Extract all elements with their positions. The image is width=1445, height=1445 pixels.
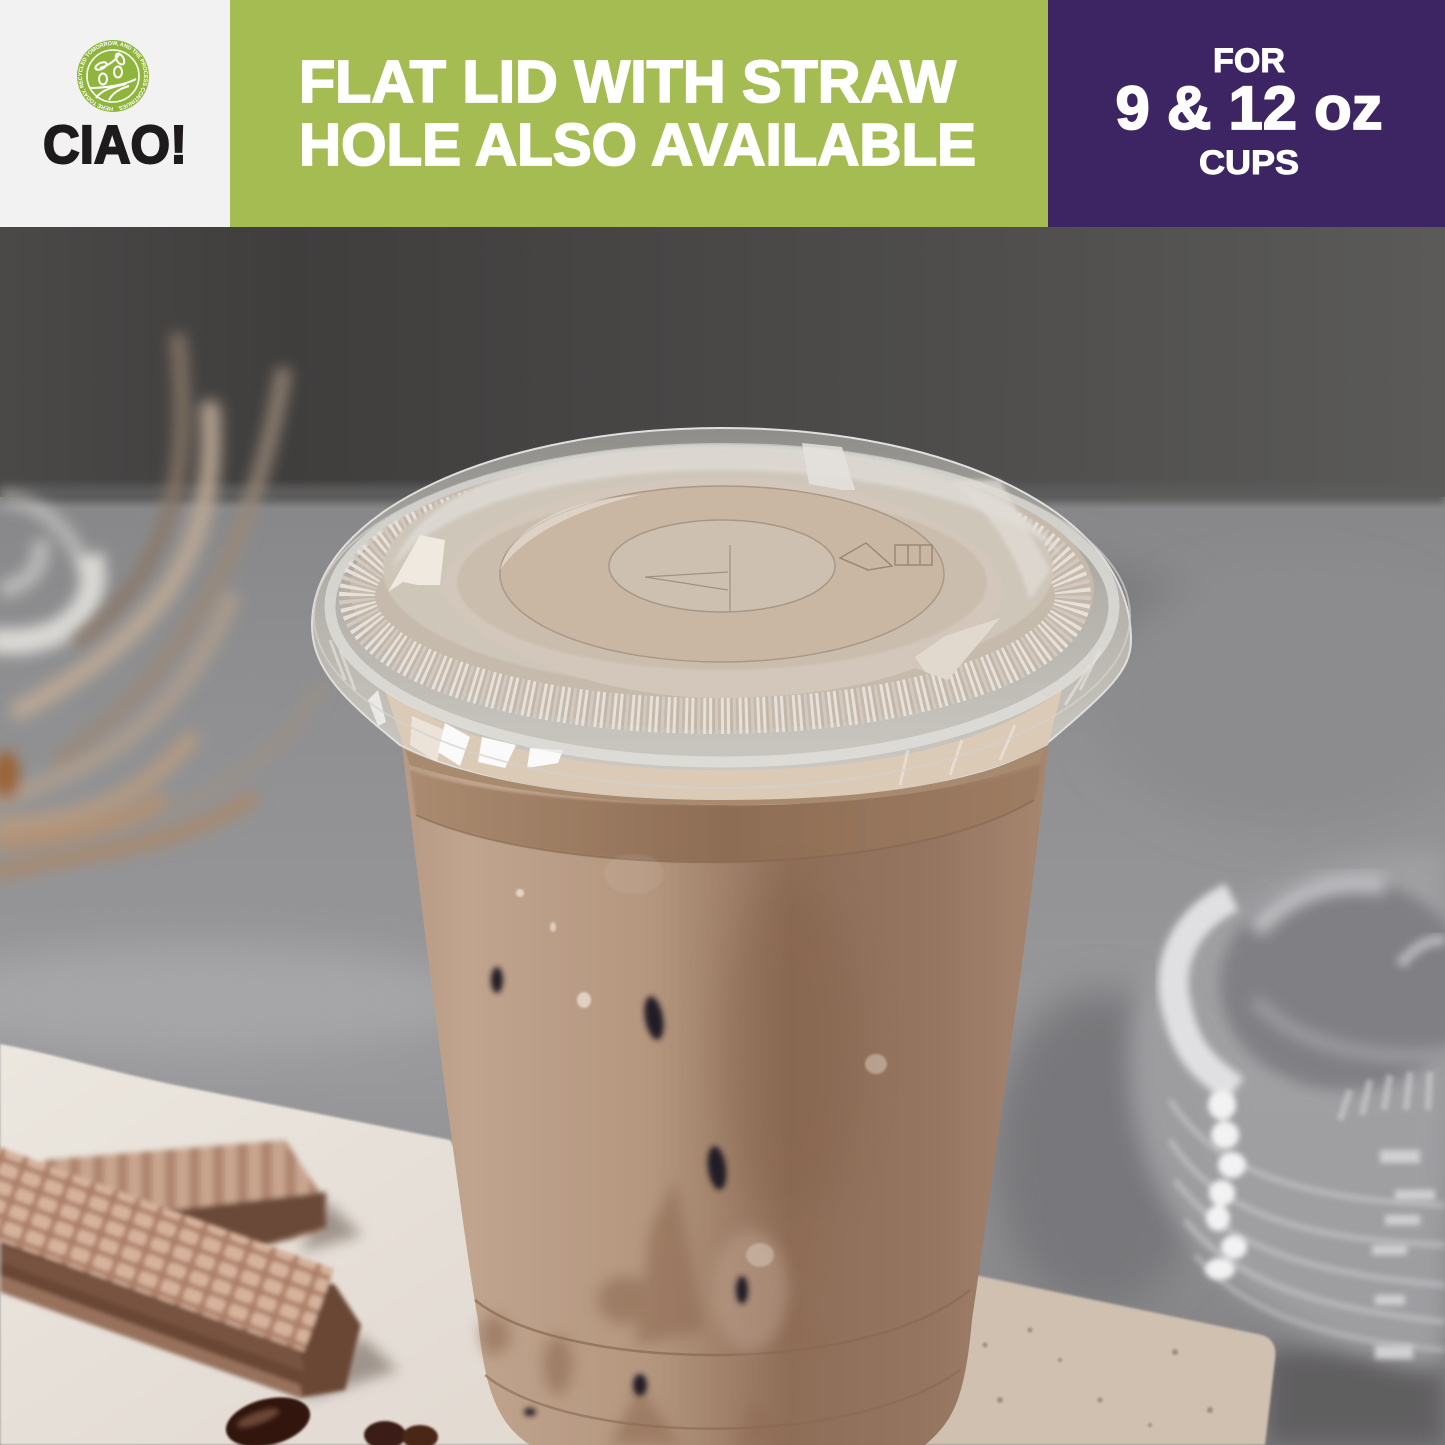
rim xyxy=(330,450,1114,762)
bottom rings xyxy=(475,1290,970,1429)
size text: CUPS xyxy=(1199,144,1299,182)
dark tapioca pearls xyxy=(491,967,748,1416)
cup of iced coffee xyxy=(402,745,1048,1445)
stone board with wafers xyxy=(0,1044,640,1445)
coffee beans xyxy=(221,1389,438,1445)
centre well xyxy=(440,478,1005,698)
wafer shadow xyxy=(300,1200,398,1402)
size text: 9 & 12 oz xyxy=(1116,74,1382,142)
size text: FOR xyxy=(1213,42,1285,80)
header: green headline panel xyxy=(230,0,1048,227)
wafer front xyxy=(0,1145,361,1398)
small stone coaster xyxy=(850,1275,1275,1445)
milk swirls xyxy=(480,1180,818,1445)
logo badge: HERE TODAY, RECYCLED TOMORROW, AND THE PROCESS CONTINUES. xyxy=(78,41,148,111)
header: logo panel xyxy=(0,0,230,227)
cup darker centre xyxy=(720,880,860,1220)
skirt highlights xyxy=(368,690,563,768)
wafer back xyxy=(30,1140,328,1250)
clear flat lid with straw hole xyxy=(312,428,1131,805)
ribbed ring xyxy=(350,450,1094,730)
headline: FLAT LID WITH STRAW xyxy=(299,49,956,115)
headline xyxy=(299,49,976,178)
stack of clear lids xyxy=(1129,850,1445,1370)
coffee showing through skirt xyxy=(385,690,1062,800)
size text xyxy=(1116,42,1382,182)
blurred dried grass and glass bowl xyxy=(0,340,320,872)
logo wordmark: CIAO! xyxy=(43,115,187,175)
lid outer skirt, translucent xyxy=(312,428,1131,804)
water droplets xyxy=(516,854,887,1267)
recycling mark xyxy=(840,543,932,570)
headline: HOLE ALSO AVAILABLE xyxy=(299,112,976,178)
cup top band xyxy=(410,765,1040,862)
lid inner recessed ring xyxy=(383,452,1053,688)
header: purple size panel xyxy=(1048,0,1445,227)
tear-off straw circle xyxy=(609,520,835,612)
